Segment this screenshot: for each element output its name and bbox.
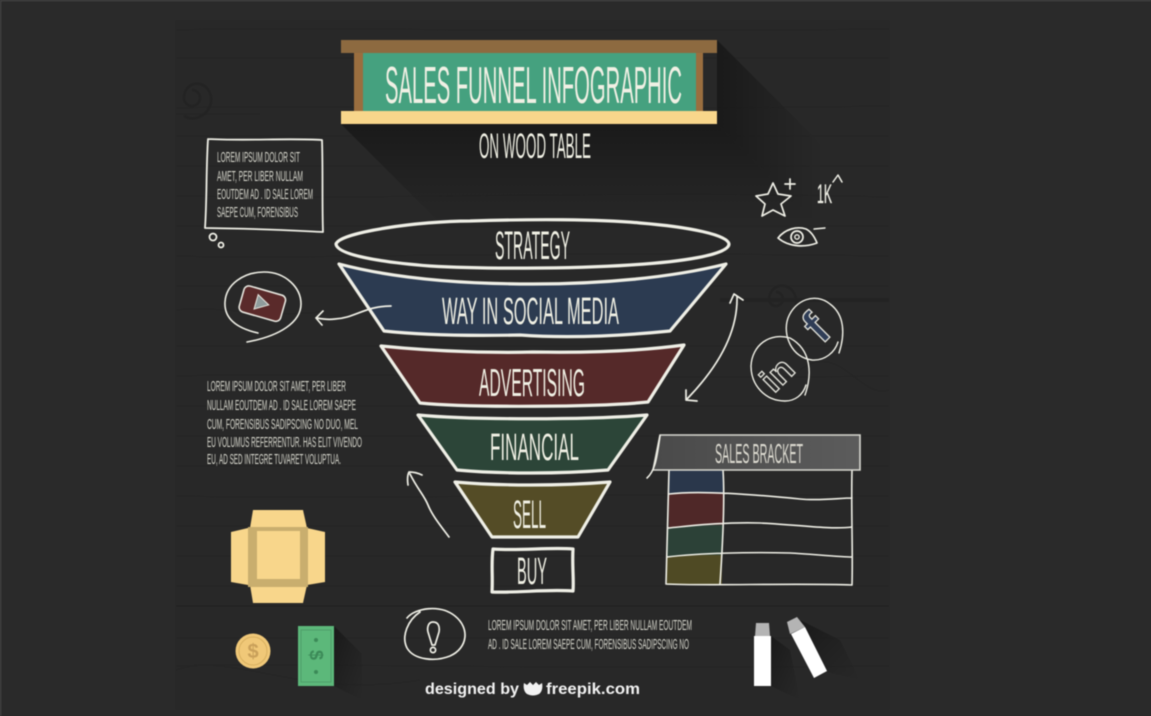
coin icon: $: [247, 641, 259, 663]
funnel level: buy: [492, 548, 573, 593]
box icon: [231, 510, 325, 603]
freepik credit: [425, 681, 640, 698]
funnel level: advertising: ADVERTISING: [479, 362, 585, 405]
footer note: [488, 618, 692, 653]
paragraph: LOREM IPSUM DOLOR SIT AMET, PER LIBER: [207, 379, 346, 395]
text: NULLAM EOUTDEM AD . ID SALE LOREM SAEPE: [207, 398, 356, 414]
funnel level: buy: BUY: [517, 551, 547, 593]
text: LOREM IPSUM DOLOR SIT AMET, PER LIBER NULLAM EOUTDEM: [488, 618, 692, 634]
note text: AMET, PER LIBER NULLAM: [217, 169, 303, 185]
text: ON WOOD TABLE: [479, 127, 591, 166]
text: EOUTDEM AD . ID SALE LOREM: [217, 187, 313, 203]
text: SALES FUNNEL INFOGRAPHIC: [385, 57, 682, 115]
table grid: [666, 470, 852, 585]
1K label: 1K: [817, 179, 832, 209]
linkedin circle: in: [753, 350, 802, 400]
arrow to youtube: [316, 306, 391, 325]
long shadow of title board: [341, 40, 823, 230]
funnel level: way in social media: WAY IN SOCIAL MEDIA: [442, 291, 619, 333]
banknote icon: $: [306, 650, 326, 660]
tilted chalk: [787, 617, 827, 678]
wood table background: [175, 20, 890, 710]
freepik credit: freepik.com: [546, 681, 640, 698]
funnel level: strategy: STRATEGY: [495, 224, 570, 268]
note text: [217, 150, 313, 221]
note text: SAEPE CUM, FORENSIBUS: [217, 205, 298, 221]
banknote icon: [298, 626, 362, 700]
1K label: [817, 175, 842, 209]
note text: LOREM IPSUM DOLOR SIT: [217, 150, 300, 166]
thought bubble note: [205, 139, 323, 248]
text: CUM, FORENSIBUS SADIPSCING NO DUO, MEL: [207, 417, 358, 433]
title board: [341, 40, 717, 124]
funnel level: sell: [455, 482, 610, 537]
funnel level: strategy: [336, 220, 729, 268]
table header: SALES BRACKET: [715, 438, 803, 469]
funnel level: sell: SELL: [513, 493, 546, 537]
exclamation bubble: [405, 609, 465, 659]
paragraph: EU, AD SED INTEGRE TUVARET VOLUPTUA.: [207, 452, 341, 468]
funnel level: financial: FINANCIAL: [490, 427, 579, 469]
arrow up-left: [408, 472, 449, 537]
text: EU VOLUMUS REFERRENTUR. HAS ELIT VIVENDO: [207, 435, 362, 451]
upright chalk: [754, 623, 771, 686]
table header: [647, 435, 860, 478]
eye icon: [778, 228, 825, 246]
chalk sticks: [754, 617, 860, 700]
funnel level: way in social media: [339, 264, 726, 337]
funnel: [336, 220, 729, 593]
text: AD . ID SALE LOREM SAEPE CUM, FORENSIBUS SADIPSCING NO: [488, 637, 689, 653]
sales bracket table: [647, 435, 860, 585]
table colour cells: [667, 470, 723, 585]
youtube icon: [225, 272, 301, 342]
double arrow: [686, 294, 743, 401]
freepik credit: designed by: [425, 681, 519, 698]
paragraph: [207, 379, 362, 468]
funnel level: financial: [418, 415, 647, 473]
social icons: [751, 298, 843, 401]
star icon: [756, 179, 795, 216]
coin icon: [236, 634, 270, 668]
facebook circle: f: [792, 303, 842, 353]
funnel level: advertising: [381, 345, 684, 406]
